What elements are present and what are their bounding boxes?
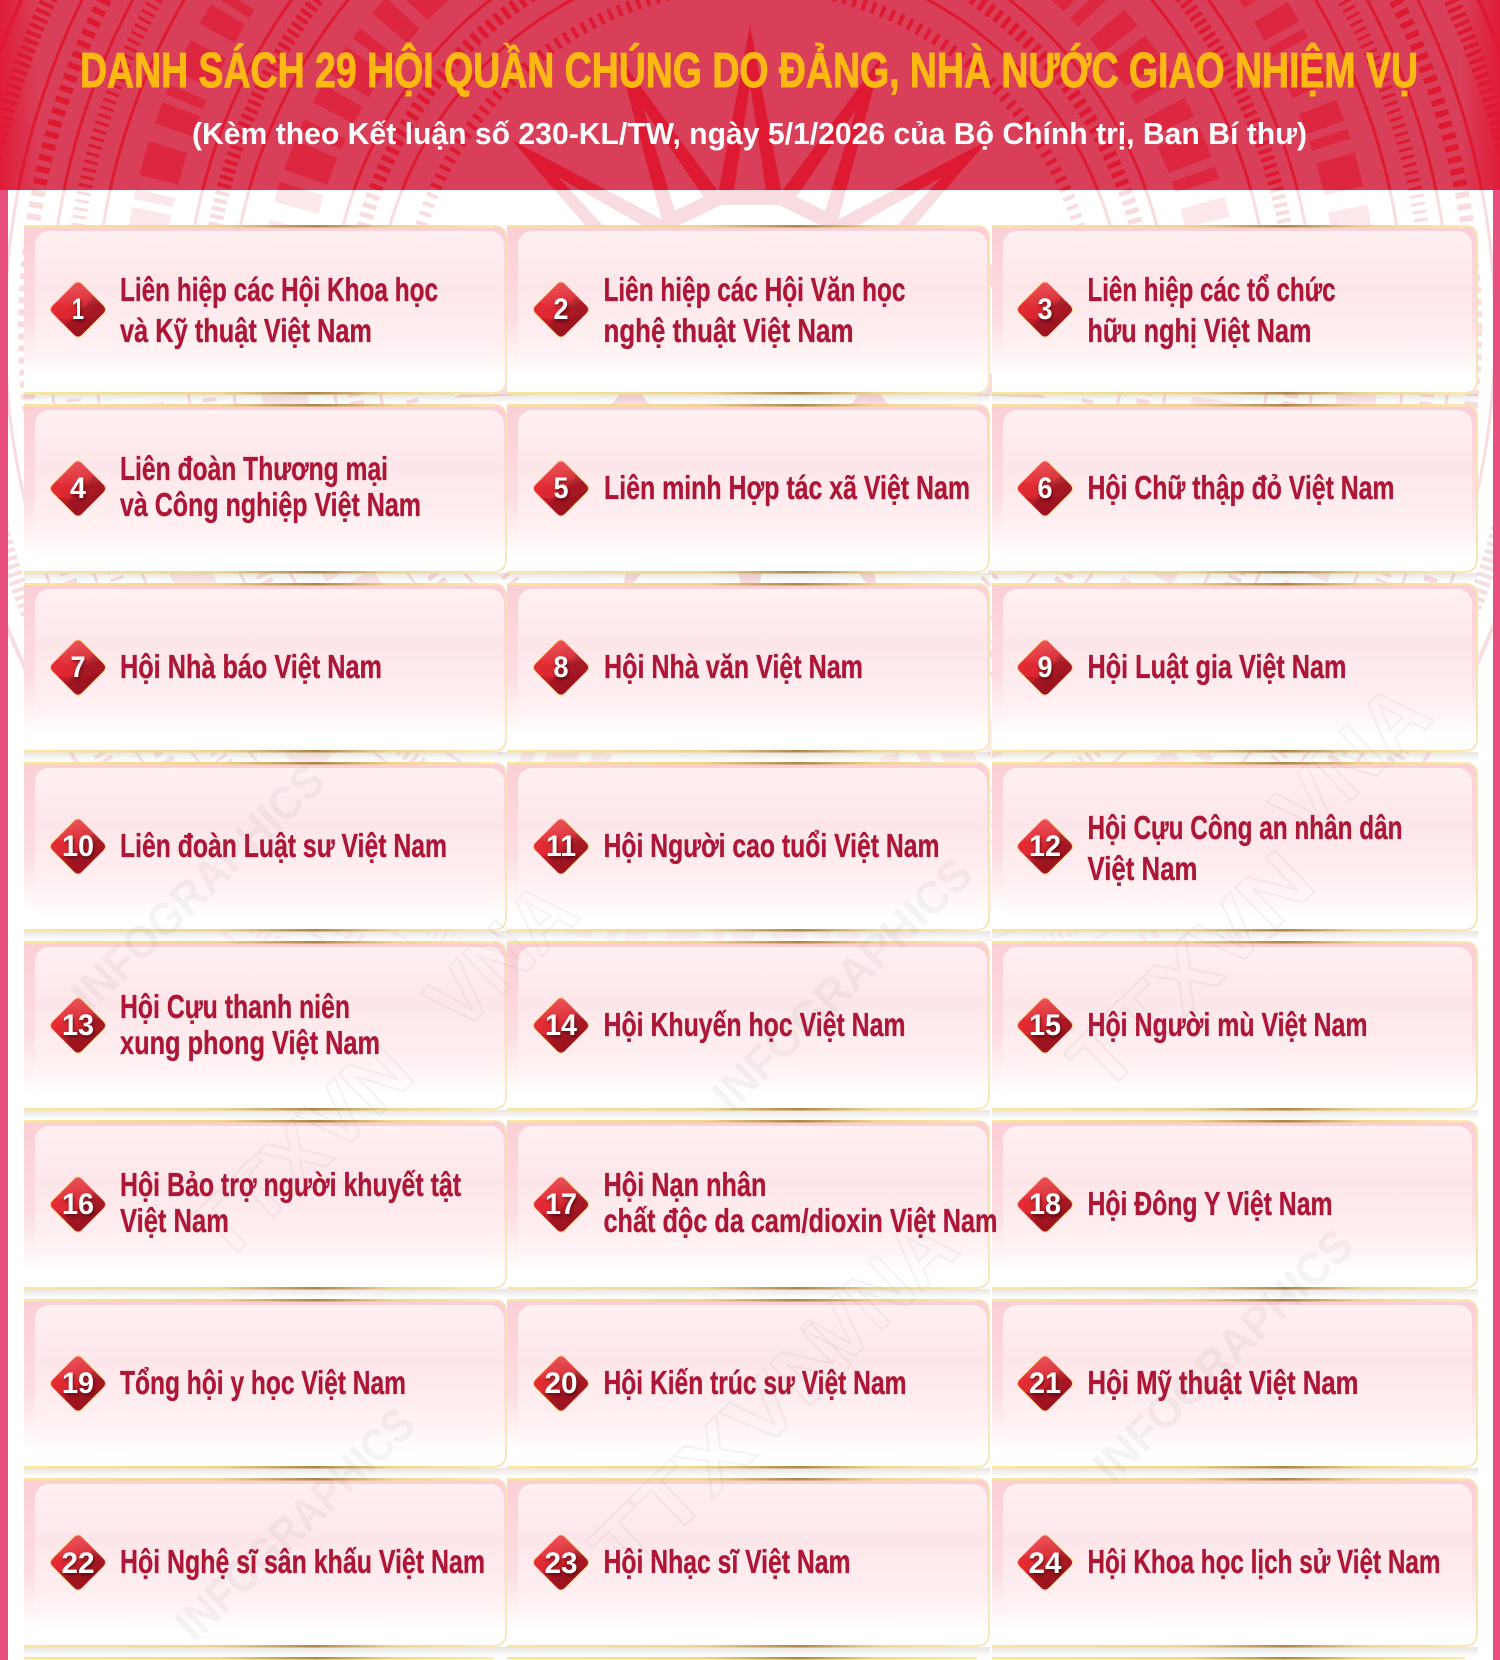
card 3 [992,225,1478,403]
badge 2: 2 [554,293,568,326]
watermarks: TTXVN [171,1023,430,1278]
card 21 text: Hội Mỹ thuật Việt Nam [1088,1364,1358,1401]
card 9 [992,583,1478,761]
card 18 text: Hội Đông Y Việt Nam [1088,1185,1332,1222]
badge 23 [530,1518,592,1594]
card 3 text [1088,271,1336,349]
card 12 text: Việt Nam [1088,850,1198,887]
watermarks: TTXVN [1050,833,1331,1109]
badge 16 [47,1160,109,1236]
badge 13: 13 [62,1009,94,1042]
card 16 [24,1120,507,1298]
header band [0,0,1500,190]
card 6 [992,404,1478,582]
watermarks: INFOGRAPHICS [61,754,335,1020]
badge 22 [47,1518,109,1594]
badge 11 [530,802,592,878]
card 4 text: và Công nghiệp Việt Nam [120,486,421,523]
card 12 [992,762,1478,940]
card 21 [992,1299,1478,1477]
card 3 text: Liên hiệp các tổ chức [1088,271,1336,308]
badge 22: 22 [62,1547,94,1580]
badge 4: 4 [70,472,86,505]
badge 19: 19 [62,1367,94,1400]
badge 13 [47,982,109,1056]
card 8 [507,583,990,761]
card 4 text: Liên đoàn Thương mại [120,450,388,487]
badge 21: 21 [1029,1367,1061,1400]
card 17 text: Hội Nạn nhân [604,1166,766,1203]
card 15 [992,941,1478,1119]
card 4 text [120,450,421,523]
badge 20 [530,1340,592,1414]
card 17 text: chất độc da cam/dioxin Việt Nam [604,1202,998,1239]
card 16 text: Việt Nam [120,1202,229,1239]
badge 20: 20 [544,1367,578,1400]
card 4 [24,404,507,582]
badge 12 [1014,802,1076,878]
card 24 [992,1478,1478,1656]
badge 23: 23 [544,1547,578,1580]
badge 18: 18 [1029,1188,1061,1221]
card 5 [507,404,990,582]
card 17 text [604,1166,998,1239]
badge 9 [1014,624,1076,698]
card 22 [24,1478,507,1656]
badge 9: 9 [1038,651,1052,684]
badge 5 [530,444,592,520]
card 13 text [120,988,380,1061]
watermarks: INFOGRAPHICS [702,847,982,1121]
card 3 text: hữu nghị Việt Nam [1088,312,1312,349]
card 10 text: Liên đoàn Luật sư Việt Nam [120,827,447,864]
badge 15 [1014,982,1076,1056]
card 19 [24,1299,507,1477]
card 23 text: Hội Nhạc sĩ Việt Nam [604,1543,850,1580]
watermarks: TTXVN [573,1306,868,1596]
badge 11: 11 [546,830,576,863]
badge 7: 7 [70,651,86,684]
card 1 [24,225,507,403]
card 15 text: Hội Người mù Việt Nam [1088,1006,1368,1043]
badge 18 [1014,1160,1076,1236]
badge 10: 10 [62,830,94,863]
badge 14 [530,982,592,1056]
card 8 text: Hội Nhà văn Việt Nam [604,648,863,685]
next row edge [24,1657,1465,1660]
badge 3 [1014,266,1076,340]
subtitle: (Kèm theo Kết luận số 230-KL/TW, ngày 5/1/2026 của Bộ Chính trị, Ban Bí thư) [192,116,1307,151]
badge 17 [530,1160,592,1236]
card 14 [507,941,990,1119]
watermarks: INFOGRAPHICS [1083,1218,1363,1492]
card 20 text: Hội Kiến trúc sư Việt Nam [604,1364,906,1401]
card 1 text [120,271,438,349]
card 1 text: Liên hiệp các Hội Khoa học [120,271,438,308]
badge 2 [530,266,592,340]
card 13 text: Hội Cựu thanh niên [120,988,350,1025]
badge 8: 8 [554,651,568,684]
badge 6: 6 [1038,472,1052,505]
card 11 [507,762,990,940]
badge 8 [530,624,592,698]
watermarks: INFOGRAPHICS [165,1398,425,1650]
badge 3: 3 [1038,293,1052,326]
card 22 text: Hội Nghệ sĩ sân khấu Việt Nam [120,1543,485,1580]
card 20 [507,1299,990,1477]
watermarks [61,664,1448,1650]
card 18 [992,1120,1478,1298]
card 1 text: và Kỹ thuật Việt Nam [120,312,372,349]
card 16 text [120,1166,461,1239]
badge 7 [47,624,109,698]
card 12 text [1088,809,1402,887]
card 17 [507,1120,998,1298]
card 5 text: Liên minh Hợp tác xã Việt Nam [604,469,970,506]
card 2 text [604,271,906,349]
badge 6 [1014,444,1076,520]
card 14 text: Hội Khuyến học Việt Nam [604,1006,906,1043]
card 13 [24,941,507,1119]
card 2 text: Liên hiệp các Hội Văn học [604,271,906,308]
badge 19 [47,1340,109,1414]
card 7 [24,583,507,761]
badge 24 [1014,1518,1076,1594]
badge 24: 24 [1028,1547,1062,1580]
watermarks: VNA [1253,664,1448,857]
badge 4 [47,444,109,520]
watermarks: VNA [787,1198,974,1384]
badge 17: 17 [545,1188,577,1221]
badge 16: 16 [62,1188,94,1221]
watermarks: VNA [407,863,594,1049]
badge 10 [47,802,109,878]
page background pattern [8,190,1493,989]
badge 12: 12 [1029,830,1061,863]
card 23 [507,1478,990,1656]
card 2 [507,225,990,403]
card 11 text: Hội Người cao tuổi Việt Nam [604,827,940,864]
card 6 text: Hội Chữ thập đỏ Việt Nam [1088,469,1394,506]
badge 1 [47,266,109,340]
badge 21 [1014,1340,1076,1414]
card 16 text: Hội Bảo trợ người khuyết tật [120,1166,461,1203]
card 13 text: xung phong Việt Nam [120,1024,380,1061]
card 9 text: Hội Luật gia Việt Nam [1088,648,1346,685]
badge 5: 5 [554,472,568,505]
card 7 text: Hội Nhà báo Việt Nam [120,648,382,685]
badge 15: 15 [1029,1009,1061,1042]
badge 1: 1 [72,293,84,326]
badge 14: 14 [545,1009,577,1042]
card 2 text: nghệ thuật Việt Nam [604,312,854,349]
card 19 text: Tổng hội y học Việt Nam [120,1364,406,1401]
card 10 [24,762,507,940]
